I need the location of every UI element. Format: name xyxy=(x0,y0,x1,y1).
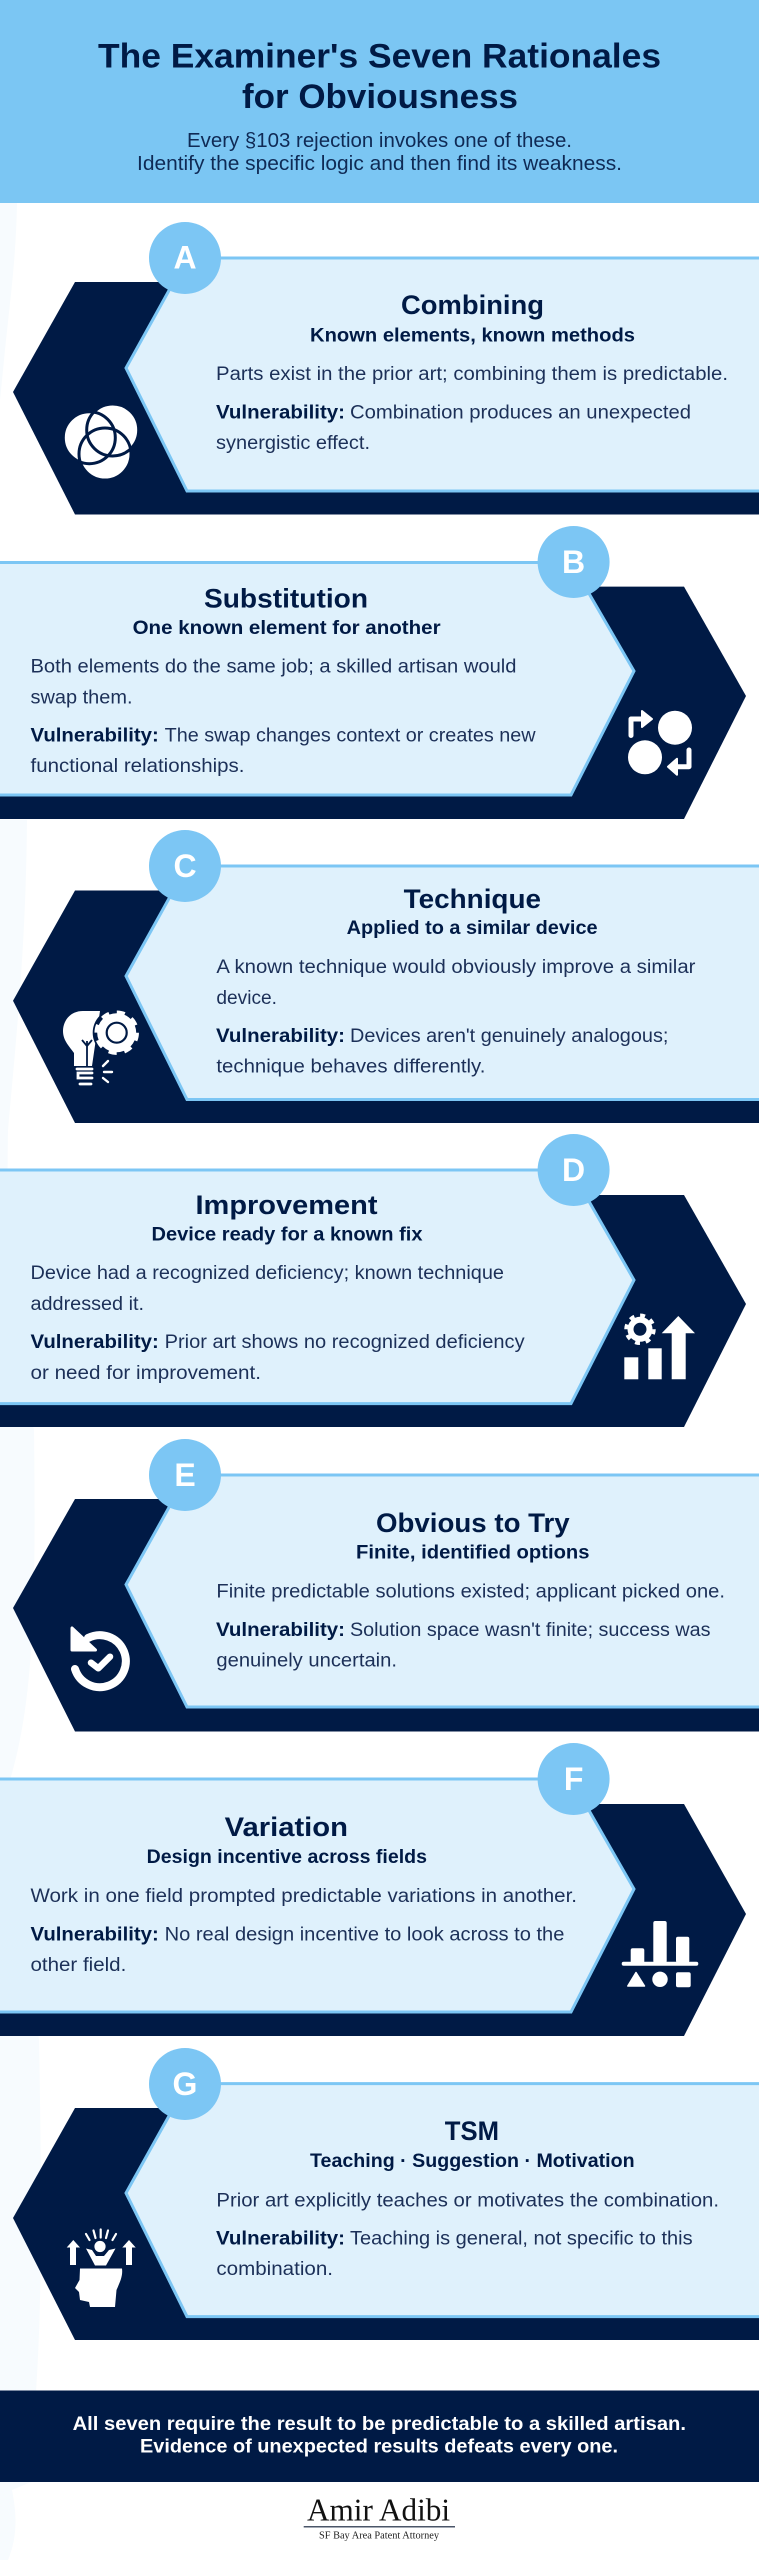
subheading: Finite, identified options xyxy=(356,1543,590,1564)
logo: Amir Adibi: SF Bay Area Patent Attorney xyxy=(319,2531,439,2542)
description: Device had a recognized deficiency; known technique xyxy=(30,1263,504,1284)
vulnerability: Vulnerability: xyxy=(216,1620,345,1641)
vulnerability: Vulnerability: xyxy=(30,1332,159,1353)
vulnerability: Combination produces an unexpected xyxy=(350,402,691,424)
heading: Combining: Combining xyxy=(401,290,544,320)
description: Prior art explicitly teaches or motivates the combination. xyxy=(216,2190,719,2211)
icon: overlapping circles xyxy=(63,404,139,480)
badge: B xyxy=(538,526,610,598)
subheading: Known elements, known methods xyxy=(310,326,635,346)
vulnerability xyxy=(216,1620,710,1672)
section G: TSM xyxy=(13,2048,759,2340)
logo: Amir Adibi xyxy=(304,2492,455,2542)
vulnerability: combination. xyxy=(216,2259,333,2280)
vulnerability: Vulnerability: xyxy=(216,1026,345,1047)
section B: Substitution xyxy=(0,526,746,819)
badge: C xyxy=(149,830,221,902)
panel: A xyxy=(126,258,759,491)
subheading: One known element for another xyxy=(133,618,441,639)
vulnerability xyxy=(216,402,691,454)
badge: E xyxy=(149,1439,221,1511)
panel: E xyxy=(126,1475,759,1707)
vulnerability xyxy=(216,2229,693,2280)
vulnerability: technique behaves differently. xyxy=(216,1057,485,1078)
vulnerability xyxy=(216,1026,668,1078)
heading: Improvement: Improvement xyxy=(196,1190,378,1220)
subheading: Teaching · Suggestion · Motivation xyxy=(310,2151,635,2172)
description: A known technique would obviously improve a similar xyxy=(216,957,696,978)
footer text xyxy=(73,2414,686,2458)
vulnerability: other field. xyxy=(30,1955,126,1976)
description: swap them. xyxy=(30,687,132,708)
icon: retry with check xyxy=(72,1628,126,1687)
footer banner xyxy=(0,2390,759,2482)
subtitle xyxy=(137,130,622,175)
vulnerability xyxy=(30,1332,525,1384)
chevron: A xyxy=(13,282,759,514)
badge: A: A xyxy=(173,240,197,276)
description: device. xyxy=(216,988,277,1009)
chevron: F xyxy=(0,1804,746,2036)
title: for Obviousness xyxy=(242,78,518,116)
panel: D xyxy=(0,1170,634,1404)
badge: E: E xyxy=(174,1457,196,1493)
panel: C xyxy=(126,866,759,1100)
heading: Substitution: Substitution xyxy=(204,584,368,614)
badge: D xyxy=(538,1134,610,1206)
vulnerability: Teaching is general, not specific to this xyxy=(350,2229,693,2250)
vulnerability: Prior art shows no recognized deficiency xyxy=(165,1332,525,1353)
badge: G xyxy=(149,2048,221,2120)
vulnerability xyxy=(30,1925,564,1976)
vulnerability: synergistic effect. xyxy=(216,433,370,454)
logo: Amir Adibi: Amir Adibi xyxy=(307,2492,450,2528)
subheading: Device ready for a known fix xyxy=(152,1225,423,1246)
vulnerability: functional relationships. xyxy=(30,756,244,777)
header banner xyxy=(0,0,759,203)
title xyxy=(98,38,661,116)
vulnerability: Vulnerability: xyxy=(216,2229,345,2250)
vulnerability: or need for improvement. xyxy=(30,1363,261,1384)
chevron: C xyxy=(13,890,759,1123)
description: Parts exist in the prior art; combining them is predictable. xyxy=(216,364,728,385)
vulnerability: Vulnerability: xyxy=(216,402,345,424)
vulnerability: Solution space wasn't finite; success was xyxy=(350,1620,710,1641)
badge: A xyxy=(149,222,221,294)
heading: TSM: TSM xyxy=(445,2116,499,2146)
panel: F xyxy=(0,1779,634,2012)
icon: light bulb and gear xyxy=(63,1009,141,1084)
subtitle: Every §103 rejection invokes one of these. xyxy=(187,130,572,152)
badge: C: C xyxy=(173,848,197,884)
chevron: E xyxy=(13,1499,759,1732)
section A: Combining xyxy=(13,222,759,514)
heading: Obvious to Try: Obvious to Try xyxy=(376,1508,570,1538)
badge: F: F xyxy=(564,1761,583,1797)
vulnerability: Vulnerability: xyxy=(30,726,159,747)
badge: F xyxy=(538,1743,610,1815)
icon: gear and rising bars xyxy=(624,1315,695,1379)
panel: B xyxy=(0,562,634,795)
description: addressed it. xyxy=(30,1294,144,1315)
description: Both elements do the same job; a skilled artisan would xyxy=(30,657,516,678)
vulnerability xyxy=(30,726,536,777)
icon: head with idea and arrows xyxy=(67,2230,136,2307)
description xyxy=(30,657,516,708)
panel: G xyxy=(126,2084,759,2317)
section D: Improvement xyxy=(0,1134,746,1427)
subtitle: Identify the specific logic and then find its weakness. xyxy=(137,153,622,175)
description: Finite predictable solutions existed; applicant picked one. xyxy=(216,1582,725,1603)
description: Work in one field prompted predictable variations in another. xyxy=(30,1886,577,1907)
badge: B: B xyxy=(562,544,585,580)
vulnerability: The swap changes context or creates new xyxy=(165,726,536,747)
section F: Variation xyxy=(0,1743,746,2036)
vulnerability: Vulnerability: xyxy=(30,1925,159,1946)
section C: Technique xyxy=(13,830,759,1123)
title: The Examiner's Seven Rationales xyxy=(98,38,661,76)
section E: Obvious to Try xyxy=(13,1439,759,1732)
heading: Technique: Technique xyxy=(404,884,541,914)
subheading: Applied to a similar device xyxy=(347,918,598,939)
vulnerability: Devices aren't genuinely analogous; xyxy=(350,1026,668,1047)
footer text: Evidence of unexpected results defeats every one. xyxy=(140,2436,618,2458)
badge: G: G xyxy=(173,2066,197,2102)
chevron: B xyxy=(0,587,746,819)
vulnerability: No real design incentive to look across to the xyxy=(165,1925,564,1946)
badge: D: D xyxy=(562,1152,585,1188)
heading: Variation: Variation xyxy=(225,1812,348,1842)
icon: swap xyxy=(628,711,692,775)
chevron: D xyxy=(0,1195,746,1427)
icon: bars and shapes xyxy=(622,1921,698,1987)
footer text: All seven require the result to be predictable to a skilled artisan. xyxy=(73,2414,686,2435)
subheading: Design incentive across fields xyxy=(147,1847,427,1868)
description xyxy=(30,1263,504,1315)
chevron: G xyxy=(13,2108,759,2340)
vulnerability: genuinely uncertain. xyxy=(216,1650,397,1672)
description xyxy=(216,957,696,1009)
